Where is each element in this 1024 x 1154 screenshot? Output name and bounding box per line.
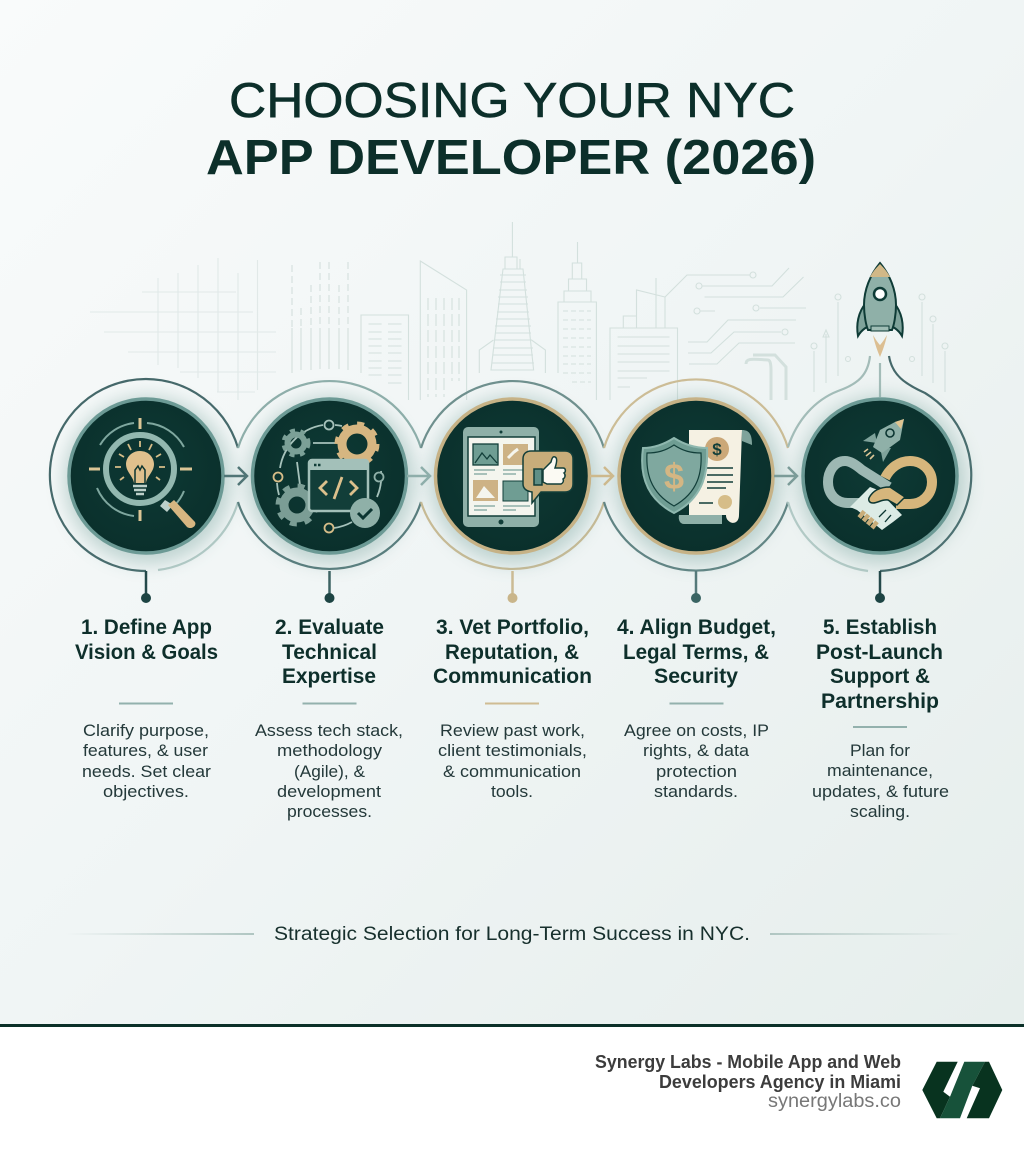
title: APP DEVELOPER (2026) <box>206 131 816 185</box>
step 2 text: 2. Evaluate <box>275 616 384 639</box>
step 4 text: Agree on costs, IP <box>624 722 769 740</box>
step 4 text: 4. Align Budget, <box>617 616 776 639</box>
step 2 text: (Agile), & <box>294 763 365 781</box>
step 5 text: maintenance, <box>827 762 933 780</box>
icon: shield and contract <box>642 430 752 524</box>
step 1 medallion <box>64 396 232 564</box>
step 2 text: Technical <box>282 641 377 664</box>
icon: magnifier with light bulb <box>89 418 195 528</box>
step 1 text: Clarify purpose, <box>83 722 209 740</box>
step 5 text: Support & <box>830 665 930 688</box>
rocket above step 5 <box>857 263 903 357</box>
footer band <box>0 1024 1024 1154</box>
step 5 text: Post-Launch <box>816 641 943 664</box>
icon: Synergy Labs logo <box>922 1062 1002 1118</box>
step 3 text: client testimonials, <box>438 742 587 760</box>
step 3 text: 3. Vet Portfolio, <box>436 616 589 639</box>
skyline backdrop <box>90 222 948 400</box>
icon: shield and contract: $ <box>712 440 722 459</box>
step 5 text: scaling. <box>850 803 910 821</box>
step 5 medallion <box>798 396 966 564</box>
step 5 text: Partnership <box>821 690 939 713</box>
step 2 text: Assess tech stack, <box>255 722 403 740</box>
title <box>206 74 816 185</box>
step 3 text: Review past work, <box>440 722 585 740</box>
footer attribution text <box>595 1052 901 1112</box>
step 3 text: & communication <box>443 763 581 781</box>
icon: shield and contract: $ <box>664 456 684 497</box>
step 2 medallion <box>247 396 415 564</box>
step 3 medallion <box>430 396 598 564</box>
step 1 text: Vision & Goals <box>75 641 218 664</box>
connector rings <box>50 356 971 571</box>
step 4 text: protection <box>656 763 737 781</box>
step 3 text: tools. <box>491 783 533 801</box>
step 5 text <box>812 616 949 821</box>
footer attribution text: Developers Agency in Miami <box>659 1072 901 1092</box>
step 3 text <box>433 616 592 801</box>
step 4 medallion <box>614 396 782 564</box>
step 2 text: processes. <box>287 803 372 821</box>
step 1 text: 1. Define App <box>81 616 212 639</box>
connector stems and dots <box>141 571 885 603</box>
step 3 text: Communication <box>433 665 592 688</box>
icon: infinity loop, handshake and rocket <box>828 419 932 530</box>
step 4 text: Security <box>654 665 738 688</box>
step 5 text: updates, & future <box>812 783 949 801</box>
step 4 text: standards. <box>654 783 738 801</box>
step 2 text <box>255 616 403 821</box>
footer attribution text: synergylabs.co <box>768 1091 901 1112</box>
title: CHOOSING YOUR NYC <box>229 74 795 128</box>
step 5 text: Plan for <box>850 742 911 760</box>
icon: tablet portfolio with thumbs up <box>463 427 573 527</box>
step 2 text: development <box>277 783 381 801</box>
icon: gears, code window and check <box>274 420 384 532</box>
step 1 text: objectives. <box>103 783 189 801</box>
step 4 text: Legal Terms, & <box>623 641 769 664</box>
step 4 text <box>617 616 776 801</box>
footer attribution text: Synergy Labs - Mobile App and Web <box>595 1052 901 1072</box>
step 1 text: features, & user <box>83 742 209 760</box>
step 1 text: needs. Set clear <box>82 763 212 781</box>
step 4 text: rights, & data <box>643 742 750 760</box>
step 5 text: 5. Establish <box>823 616 937 639</box>
arrows between steps <box>224 467 797 485</box>
tagline: Strategic Selection for Long-Term Success in NYC. <box>274 924 750 945</box>
step 2 text: Expertise <box>282 665 376 688</box>
step 2 text: methodology <box>277 742 383 760</box>
step 3 text: Reputation, & <box>445 641 579 664</box>
step 1 text <box>75 616 218 801</box>
